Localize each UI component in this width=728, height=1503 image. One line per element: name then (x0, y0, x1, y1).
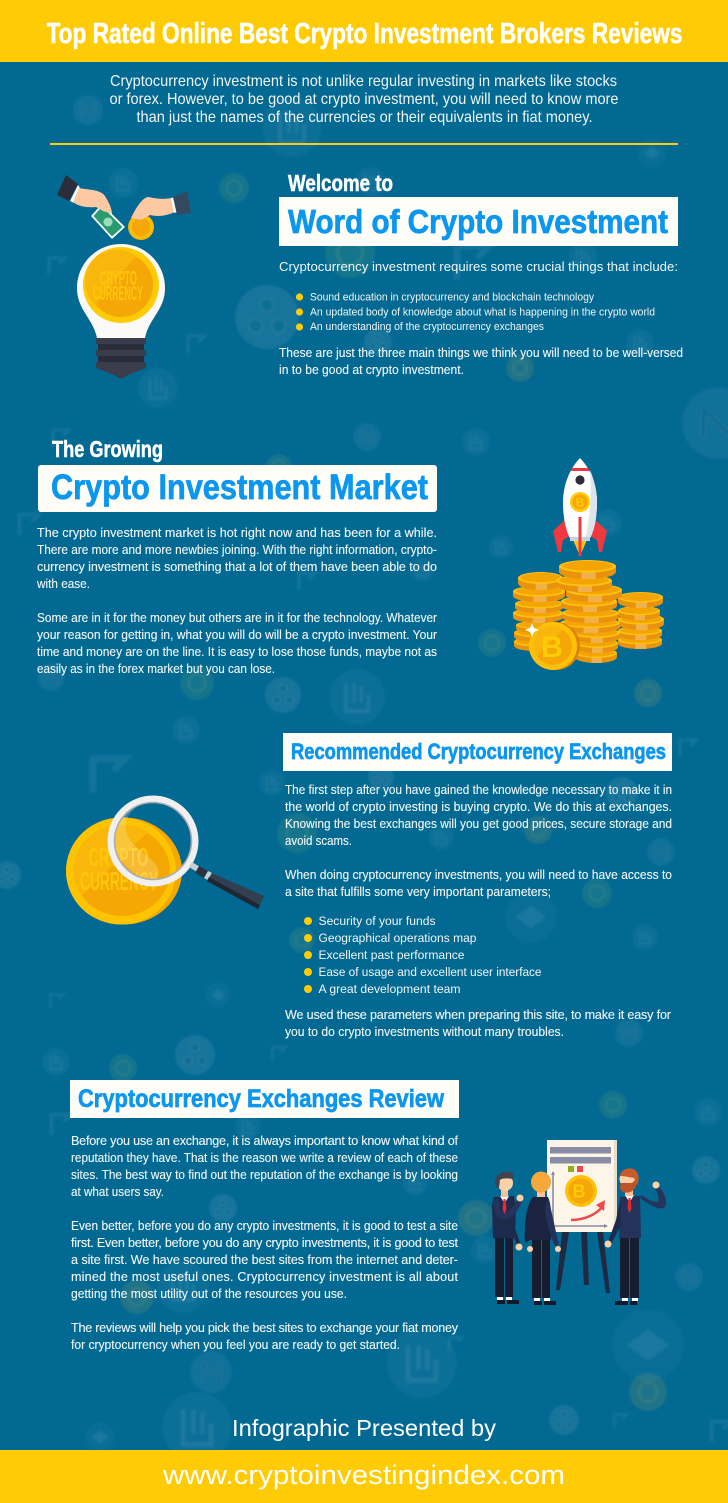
heading box: Word of Crypto Investment: Word of Crypto Investment (288, 203, 668, 240)
illustration: coin under magnifying glass: CRYPTO (88, 842, 148, 872)
illustration: coin under magnifying glass (66, 799, 264, 924)
review body text (71, 1134, 459, 1352)
exchanges parameter bullet list: Ease of usage and excellent user interface (318, 965, 542, 979)
illustration: business team at crypto flip chart (492, 1140, 666, 1305)
review body text: The reviews will help you pick the best sites to exchange your fiat money (71, 1321, 459, 1335)
exchanges intro text: a site that fulfills some very important parameters; (285, 885, 551, 899)
exchanges intro text: Knowing the best exchanges will you get good prices, secure storage and (285, 817, 672, 831)
heading box: Word of Crypto Investment (279, 197, 678, 246)
footer: presented by: Infographic Presented by (232, 1415, 497, 1441)
market body text: The crypto investment market is hot right now and has been for a while. (37, 526, 437, 540)
welcome bullet list: An updated body of knowledge about what is happening in the crypto world (310, 306, 655, 318)
title banner (0, 0, 728, 62)
illustration: rocket over bitcoin coin stacks: B (576, 496, 585, 510)
review body text: for cryptocurrency when you feel you are ready to get started. (71, 1338, 400, 1352)
illustration: business team at crypto flip chart: B (572, 1182, 586, 1202)
heading box: Cryptocurrency Exchanges Review: Cryptocurrency Exchanges Review (78, 1085, 444, 1113)
exchanges parameter bullet list (304, 914, 542, 996)
market body text: There are more and more newbies joining. With the right information, crypto- (37, 543, 437, 557)
heading: Welcome to: Welcome to (288, 170, 393, 196)
welcome bullet list: An understanding of the cryptocurrency exchanges (310, 321, 545, 333)
illustration: hands dropping money into crypto light bulb: CURRENCY (93, 283, 143, 305)
exchanges intro text: the world of crypto investing is buying crypto. We do this at exchanges. (285, 800, 672, 814)
welcome closing text: These are just the three main things we think you will need to be well-versed (279, 346, 683, 360)
market body text: time and money are on the line. It is easy to lose those funds, maybe not as (37, 645, 437, 659)
intro text: than just the names of the currencies or their equivalents in fiat money. (136, 109, 592, 126)
intro text: Cryptocurrency investment is not unlike regular investing in markets like stocks (110, 73, 617, 90)
exchanges intro text: The first step after you have gained the knowledge necessary to make it in (285, 783, 672, 797)
exchanges intro text (285, 783, 672, 899)
review body text: reputation they have. That is the reason we write a review of each of these (71, 1151, 458, 1165)
review body text: getting the most utility out of the resources you use. (71, 1287, 347, 1301)
review body text: a site first. We have scoured the best sites from the internet and deter- (71, 1253, 458, 1267)
market body text: currency investment is something that a lot of them have been able to do (37, 560, 437, 574)
exchanges parameter bullet list: A great development team (318, 982, 460, 996)
exchanges closing text: you to do crypto investments without many troubles. (285, 1025, 564, 1039)
market body text: with ease. (36, 577, 90, 591)
illustration: hands dropping money into crypto light bulb: CRYPTO (100, 268, 137, 290)
intro text: or forex. However, to be good at crypto investment, you will need to know more (110, 91, 618, 108)
review body text: first. Even better, before you do any crypto investments, it is good to test (71, 1236, 458, 1250)
illustration: rocket over bitcoin coin stacks (513, 458, 664, 670)
intro text (110, 73, 618, 126)
welcome bullet list: Sound education in cryptocurrency and blockchain technology (310, 292, 595, 304)
exchanges intro text: avoid scams. (285, 834, 352, 848)
review body text: mined the most useful ones. Cryptocurrency investment is all about (71, 1270, 458, 1284)
market body text: Some are in it for the money but others are in it for the technology. Whatever (37, 611, 437, 625)
footer banner with website (0, 1450, 728, 1503)
heading box: Recommended Cryptocurrency Exchanges (283, 733, 672, 771)
exchanges parameter bullet list: Security of your funds (318, 914, 436, 928)
market body text (36, 526, 437, 676)
review body text: at what users say. (71, 1185, 164, 1199)
heading box: Crypto Investment Market: Crypto Investment Market (51, 468, 428, 507)
exchanges closing text: We used these parameters when preparing this site, to make it easy for (285, 1008, 671, 1022)
review body text: sites. The best way to find out the reputation of the exchange is by looking (71, 1168, 458, 1182)
illustration: hands dropping money into crypto light bulb (57, 175, 191, 379)
review body text: Even better, before you do any crypto investments, it is good to test a site (71, 1219, 458, 1233)
exchanges intro text: When doing cryptocurrency investments, you will need to have access to (285, 868, 672, 882)
heading: The Growing: The Growing (52, 436, 163, 462)
market body text: your reason for getting in, what you will do will be a crypto investment. Your (37, 628, 437, 642)
illustration: rocket over bitcoin coin stacks: B (541, 631, 563, 664)
market body text: easily as in the forex market but you can lose. (37, 662, 275, 676)
footer banner with website: www.cryptoinvestingindex.com (162, 1460, 565, 1490)
exchanges parameter bullet list: Geographical operations map (318, 931, 477, 945)
exchanges closing text (285, 1008, 671, 1039)
review body text: Before you use an exchange, it is always important to know what kind of (71, 1134, 458, 1148)
welcome closing text (279, 346, 683, 377)
welcome bullet list (296, 292, 655, 333)
welcome closing text: in to be good at crypto investment. (279, 363, 464, 377)
heading box: Cryptocurrency Exchanges Review (70, 1080, 459, 1118)
welcome lead sentence: Cryptocurrency investment requires some crucial things that include: (279, 259, 678, 274)
exchanges parameter bullet list: Excellent past performance (318, 948, 465, 962)
illustration: coin under magnifying glass: CURRENCY (80, 866, 158, 896)
